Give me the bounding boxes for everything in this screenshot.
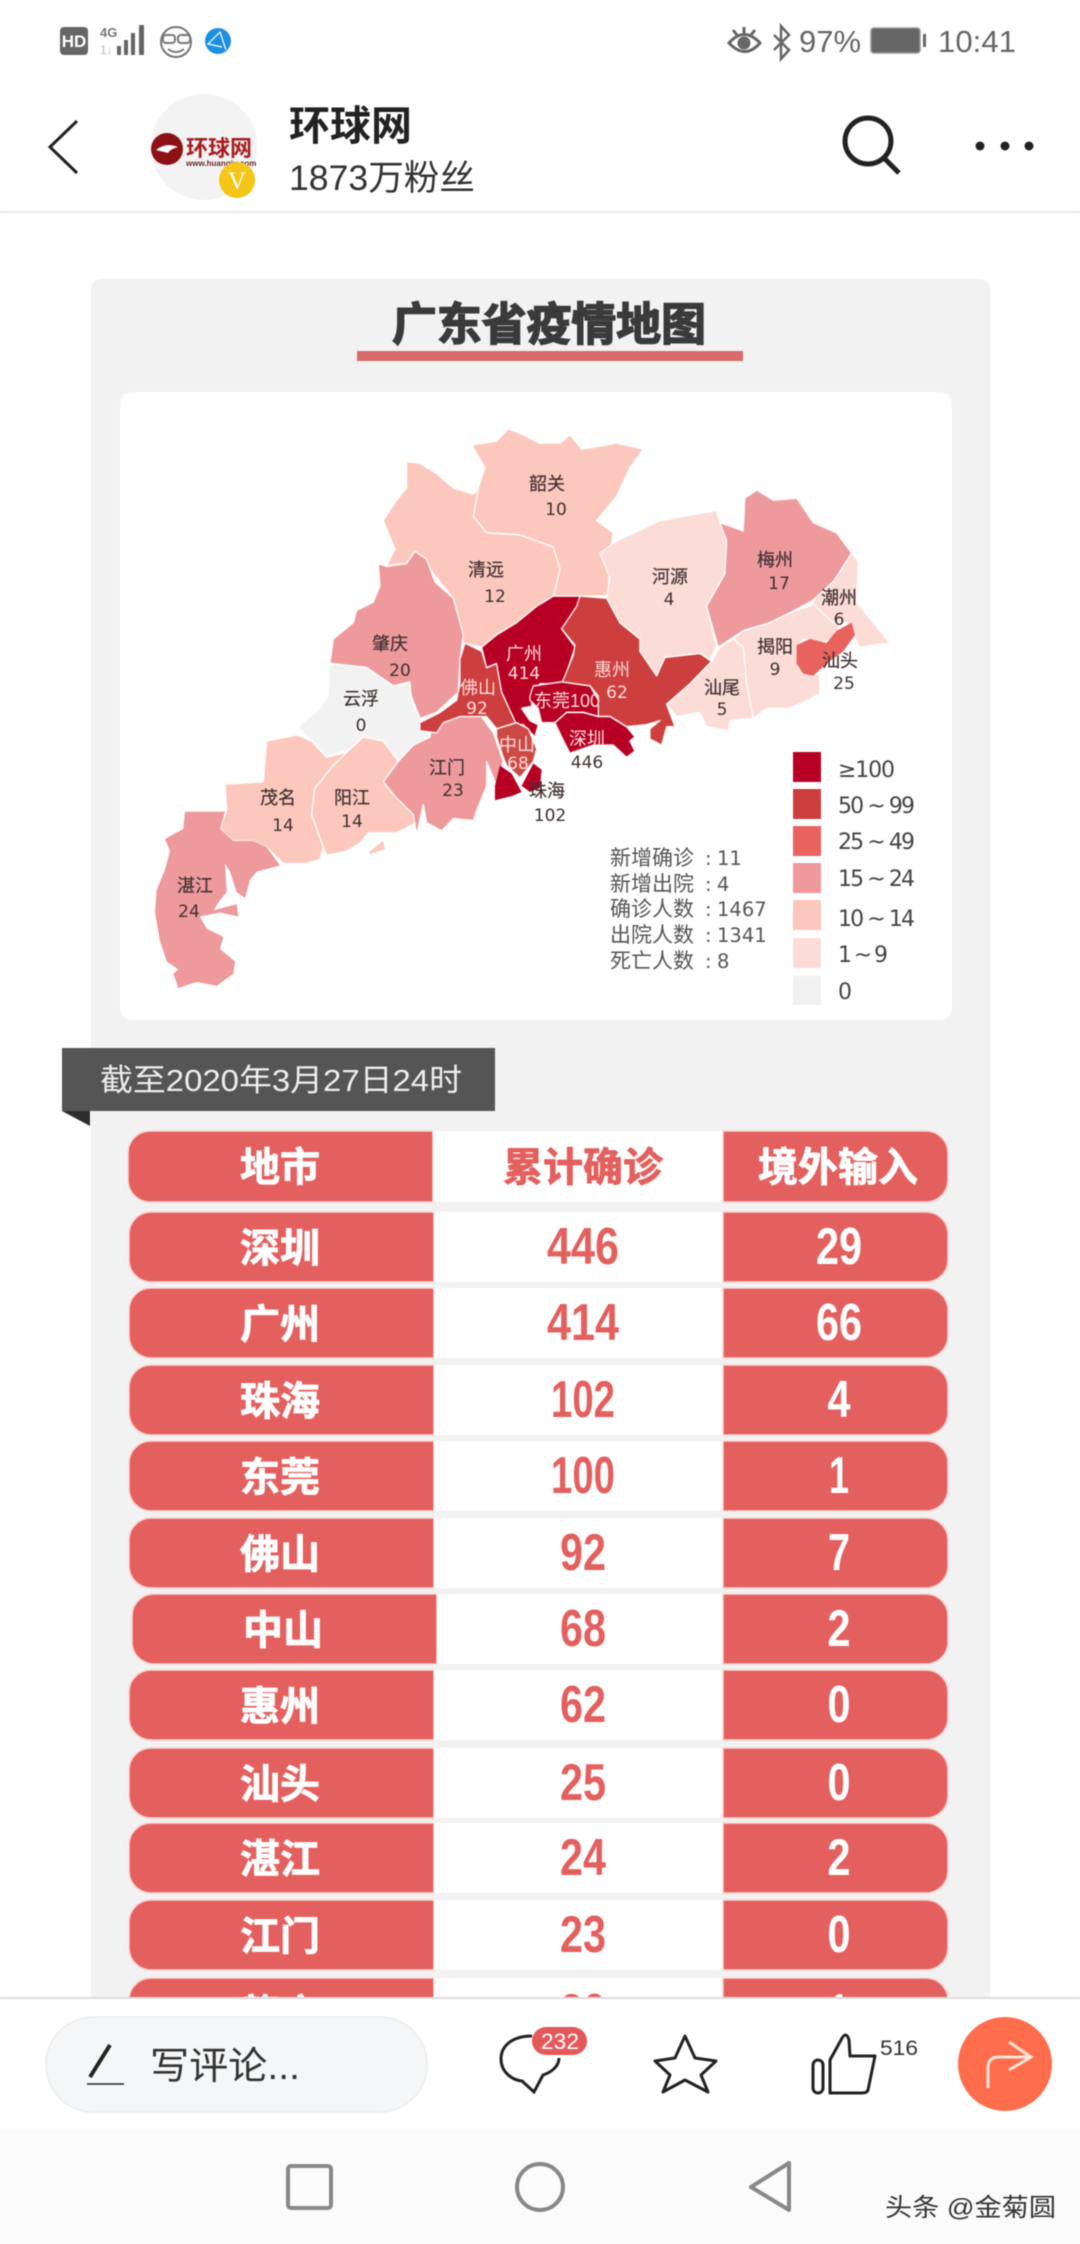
date banner: 截至2020年3月27日24时 (100, 1063, 462, 1098)
icon: HD: HD (62, 32, 86, 51)
row: 江门: 23 (560, 1906, 606, 1964)
watermark: 头条 @金菊圆 (885, 2194, 1056, 2222)
summary statistics (610, 847, 767, 973)
icon: more (976, 142, 1034, 150)
row: 汕头 (129, 1748, 948, 1818)
icon: search (845, 118, 899, 173)
summary statistics: : (705, 847, 712, 870)
comment input: 写评论... (150, 2046, 300, 2088)
map of Guangdong (155, 429, 890, 988)
title: 广东省疫情地图 (392, 299, 706, 350)
map labels: 6 (834, 610, 844, 630)
like count: 516 (880, 2037, 918, 2060)
share button (958, 2017, 1052, 2111)
map labels: 潮州 (821, 588, 857, 608)
icon: 4G signal: 1↓ (100, 43, 113, 57)
row: 中山 (132, 1594, 948, 1664)
status bar (60, 24, 1016, 59)
map labels: 汕尾 (704, 678, 740, 698)
icon: back arrow (50, 121, 77, 173)
row: 中山: 2 (828, 1600, 850, 1658)
legend: 0 (838, 980, 852, 1005)
table background cells (128, 1131, 948, 1202)
icon: 4G signal (100, 25, 144, 57)
row: 汕头: 0 (828, 1754, 850, 1812)
icon: comments with badge: 232 (541, 2029, 579, 2054)
title underline (357, 351, 743, 361)
map labels: 揭阳 (757, 637, 793, 657)
row: 东莞: 100 (551, 1447, 615, 1505)
row: 珠海: 珠海 (240, 1380, 320, 1424)
row: 东莞: 东莞 (240, 1456, 320, 1500)
row: 东莞 (129, 1441, 948, 1511)
table header: 境外输入 (758, 1146, 918, 1190)
row: 深圳: 29 (816, 1218, 862, 1276)
row: 江门 (129, 1900, 948, 1970)
summary statistics: 确诊人数 (610, 898, 694, 921)
summary statistics: 4 (717, 873, 729, 896)
row: 惠州: 62 (560, 1676, 606, 1734)
row: 佛山: 92 (560, 1524, 606, 1582)
avatar (151, 94, 257, 200)
icon: HD (60, 27, 88, 55)
avatar: V (228, 168, 246, 195)
legend (793, 752, 915, 1005)
map labels: 阳江 (334, 788, 370, 808)
navigation bar (0, 2130, 1080, 2244)
map labels: 茂名 (260, 788, 296, 808)
row: 中山: 68 (560, 1600, 606, 1658)
avatar: 环球网 (186, 136, 252, 161)
legend: 25 ~ 49 (838, 830, 915, 855)
icon: blue globe (205, 28, 231, 54)
row: 惠州 (129, 1670, 948, 1740)
map labels: 肇庆 (372, 634, 408, 654)
row: 汕头: 汕头 (240, 1763, 320, 1807)
map labels: 清远 (468, 560, 504, 580)
icon: face with glasses (161, 27, 191, 57)
map labels: 62 (606, 683, 628, 703)
row: 湛江: 2 (828, 1829, 850, 1887)
map labels: 14 (341, 812, 363, 832)
summary statistics: 新增确诊 (610, 847, 694, 870)
account name: 环球网 (289, 103, 412, 149)
map labels: 25 (833, 674, 855, 694)
row: 江门: 0 (828, 1906, 850, 1964)
map labels: 深圳 (569, 729, 605, 749)
row: 珠海: 102 (551, 1371, 615, 1429)
map labels: 102 (534, 806, 566, 826)
map labels: 0 (356, 716, 366, 736)
icon: nav back (751, 2163, 789, 2210)
legend: 1 ~ 9 (838, 943, 888, 968)
map labels: 江门 (429, 758, 465, 778)
map labels: 5 (717, 700, 727, 720)
map labels: 珠海 (529, 781, 565, 801)
summary statistics: : (705, 898, 712, 921)
summary statistics: : (705, 924, 712, 947)
row: 惠州: 惠州 (240, 1685, 320, 1729)
legend: 50 ~ 99 (838, 794, 915, 819)
map labels: 东莞100 (534, 691, 600, 711)
row: 中山: 中山 (243, 1609, 323, 1653)
row: 佛山: 7 (828, 1524, 850, 1582)
row: 广州 (129, 1288, 948, 1358)
map labels: 佛山 (460, 678, 496, 698)
summary statistics: 新增出院 (610, 873, 694, 896)
row: 广州: 414 (547, 1294, 619, 1352)
row: 江门: 江门 (240, 1915, 320, 1959)
row: 深圳: 446 (547, 1218, 619, 1276)
summary statistics: 出院人数 (610, 924, 694, 947)
map labels: 中山 (499, 735, 535, 755)
map labels: 14 (272, 816, 294, 836)
icon: eye comfort (729, 27, 760, 52)
row: 深圳: 深圳 (240, 1227, 320, 1271)
map labels: 68 (507, 754, 529, 774)
map labels: 10 (545, 500, 567, 520)
map labels: 20 (389, 661, 411, 681)
map labels: 24 (178, 902, 200, 922)
legend: ≥100 (838, 758, 895, 783)
icon: bluetooth (774, 26, 789, 59)
icon: star (655, 2036, 716, 2092)
map labels: 23 (442, 781, 464, 801)
icon: nav circle (517, 2164, 563, 2210)
map regions (155, 429, 890, 988)
map labels: 4 (664, 590, 674, 610)
map labels: 446 (571, 753, 603, 773)
legend: 15 ~ 24 (838, 867, 915, 892)
table header: 地市 (240, 1146, 320, 1190)
map labels: 广州 (506, 644, 542, 664)
row: 广州: 广州 (240, 1303, 320, 1347)
legend: 10 ~ 14 (838, 907, 915, 932)
row: 湛江 (129, 1823, 948, 1893)
battery percentage: 97% (799, 24, 861, 59)
summary statistics: : (705, 873, 712, 896)
row: 珠海 (129, 1365, 948, 1435)
bottom action bar (0, 1997, 1080, 2130)
map labels: 湛江 (177, 876, 213, 896)
date banner (62, 1048, 495, 1126)
row: 肇庆 (clipped): 20 (560, 1984, 606, 2042)
icon: thumbs up (813, 2035, 875, 2093)
map labels: 云浮 (343, 689, 379, 709)
article header (50, 94, 1034, 200)
follower count: 1873万粉丝 (289, 159, 475, 198)
map labels: 9 (770, 660, 780, 680)
map labels (177, 474, 858, 922)
row: 深圳 (129, 1212, 948, 1282)
summary statistics: : (705, 950, 712, 973)
map labels: 河源 (652, 567, 688, 587)
row: 肇庆 (clipped): 1 (829, 1984, 849, 2042)
summary statistics: 1467 (717, 898, 767, 921)
icon: 4G signal: 4G (100, 25, 117, 40)
table header (240, 1146, 918, 1190)
map labels: 梅州 (757, 550, 793, 570)
map labels: 92 (466, 699, 488, 719)
row: 肇庆 (clipped) (129, 1978, 948, 2048)
summary statistics: 1341 (717, 924, 767, 947)
row: 惠州: 0 (828, 1676, 850, 1734)
map labels: 惠州 (594, 660, 630, 680)
summary statistics: 8 (717, 950, 729, 973)
row: 肇庆 (clipped): 肇庆 (240, 1993, 320, 2037)
comment input (46, 2017, 427, 2112)
map labels: 12 (484, 587, 506, 607)
row: 汕头: 25 (560, 1754, 606, 1812)
map card (120, 392, 952, 1020)
row: 东莞: 1 (829, 1447, 849, 1505)
map labels: 韶关 (529, 474, 565, 494)
table header: 累计确诊 (503, 1146, 664, 1190)
map labels: 汕头 (822, 651, 858, 671)
row: 广州: 66 (816, 1294, 862, 1352)
panel: infographic (62, 279, 990, 2048)
map labels: 17 (768, 574, 790, 594)
summary statistics: 11 (717, 847, 742, 870)
icon: battery (871, 28, 926, 53)
avatar: www.huanqiu.com (185, 159, 256, 168)
summary statistics: 死亡人数 (610, 950, 694, 973)
icon: comments with badge (501, 2027, 587, 2092)
icon: nav square (288, 2166, 331, 2208)
row: 湛江: 湛江 (240, 1838, 320, 1882)
map labels: 414 (508, 664, 540, 684)
row: 珠海: 4 (828, 1371, 851, 1429)
row: 湛江: 24 (560, 1829, 606, 1887)
clock: 10:41 (938, 24, 1016, 59)
row: 佛山: 佛山 (240, 1533, 320, 1577)
row: 佛山 (129, 1518, 948, 1588)
